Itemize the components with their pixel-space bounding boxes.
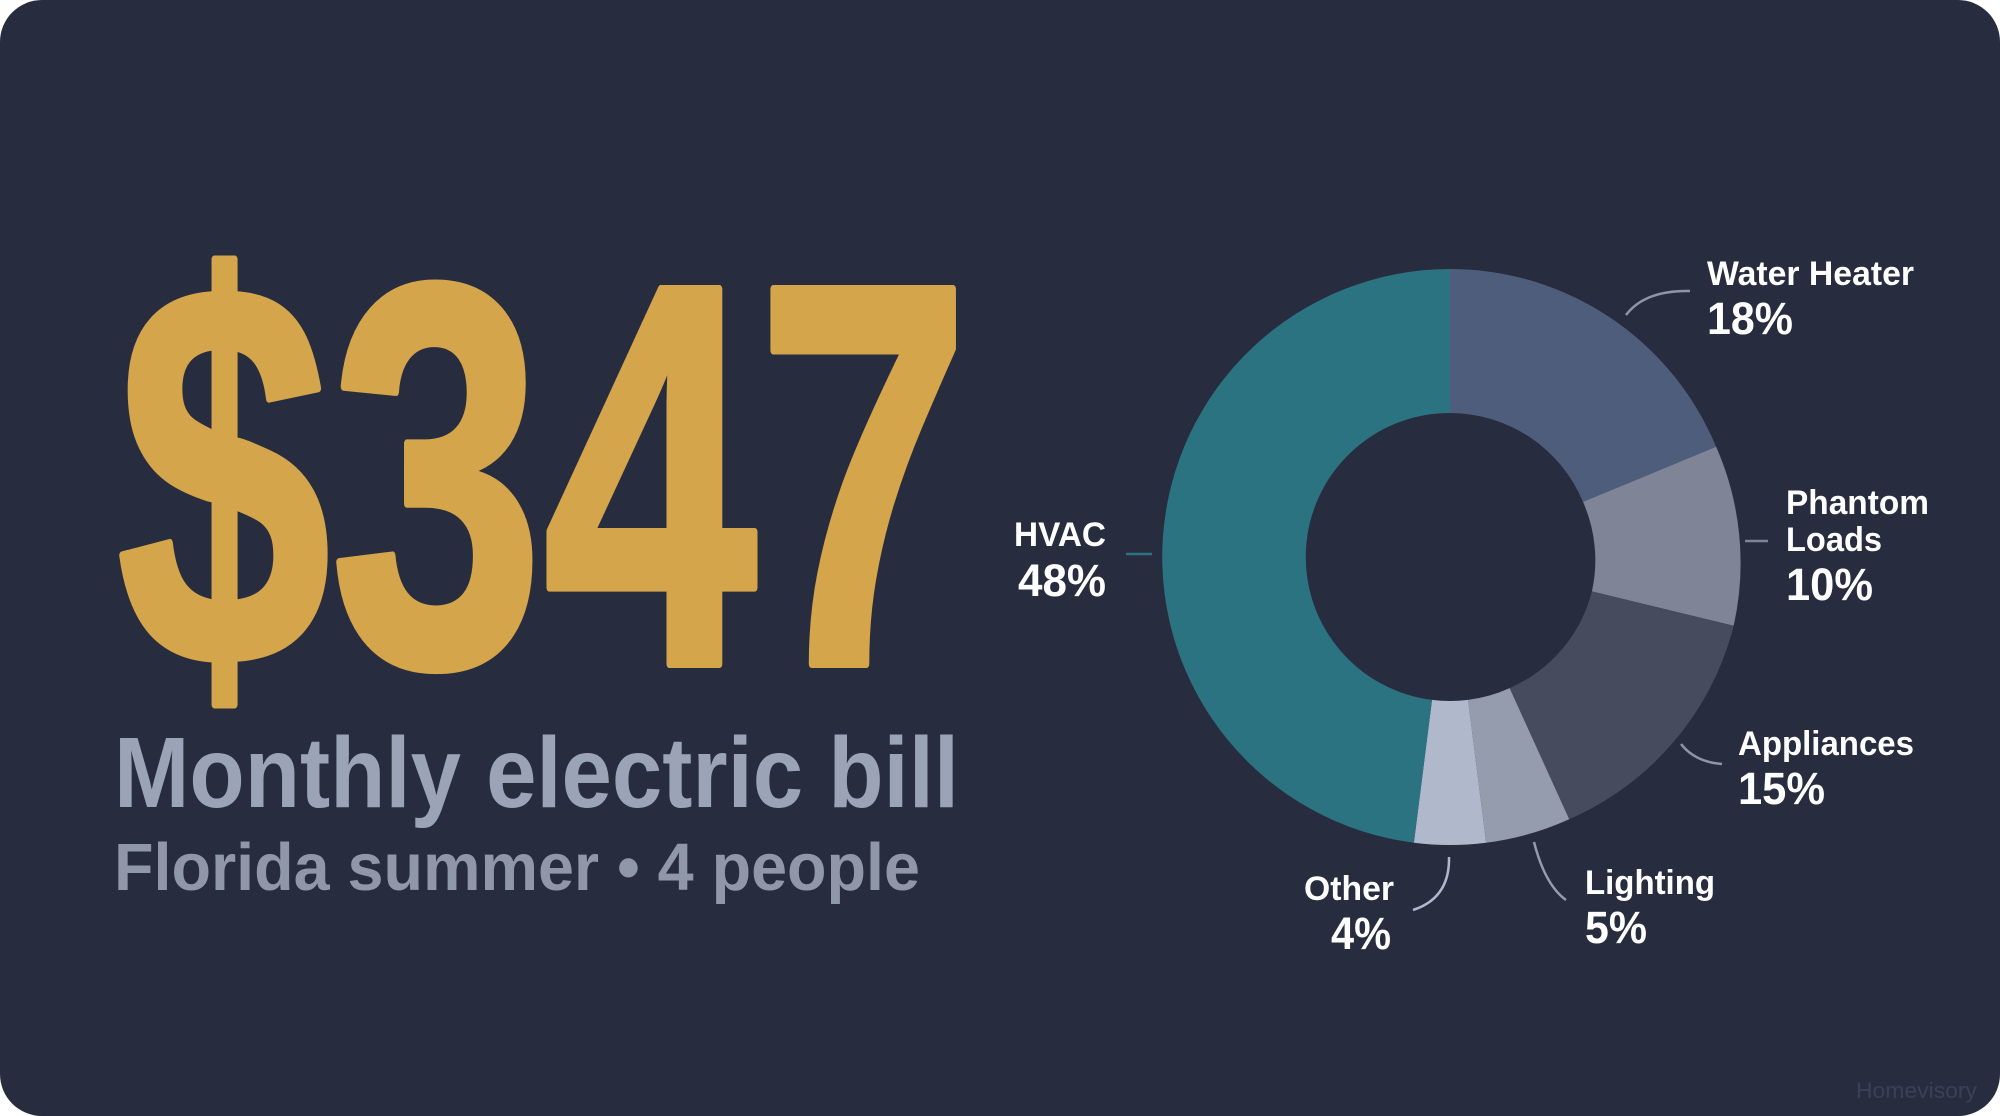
label: hvac: HVAC (1014, 516, 1106, 554)
label: hvac (1014, 516, 1106, 606)
label: lighting (1585, 864, 1715, 953)
label: phantom loads: Phantom (1786, 484, 1929, 522)
caption: Florida summer • 4 people (114, 830, 920, 905)
label: appliances (1738, 725, 1914, 814)
label: lighting: Lighting (1585, 864, 1715, 902)
big number: $347 (117, 172, 970, 780)
label: other (1304, 870, 1394, 959)
label: water heater (1707, 255, 1914, 344)
leader lines (1126, 291, 1768, 910)
label: water heater: Water Heater (1707, 255, 1914, 293)
label: lighting: 5% (1585, 902, 1647, 953)
donut chart (1162, 269, 1741, 845)
label: other: 4% (1331, 908, 1391, 959)
label: hvac: 48% (1018, 555, 1106, 606)
label: phantom loads: 10% (1786, 559, 1873, 610)
subtitle: Monthly electric bill (114, 717, 959, 829)
watermark: Homevisory (1856, 1078, 1977, 1103)
label: water heater: 18% (1707, 293, 1793, 344)
label: phantom loads: Loads (1786, 521, 1882, 559)
label: appliances: 15% (1738, 763, 1825, 814)
label: phantom loads (1786, 484, 1929, 610)
label: appliances: Appliances (1738, 725, 1914, 763)
label: other: Other (1304, 870, 1394, 908)
